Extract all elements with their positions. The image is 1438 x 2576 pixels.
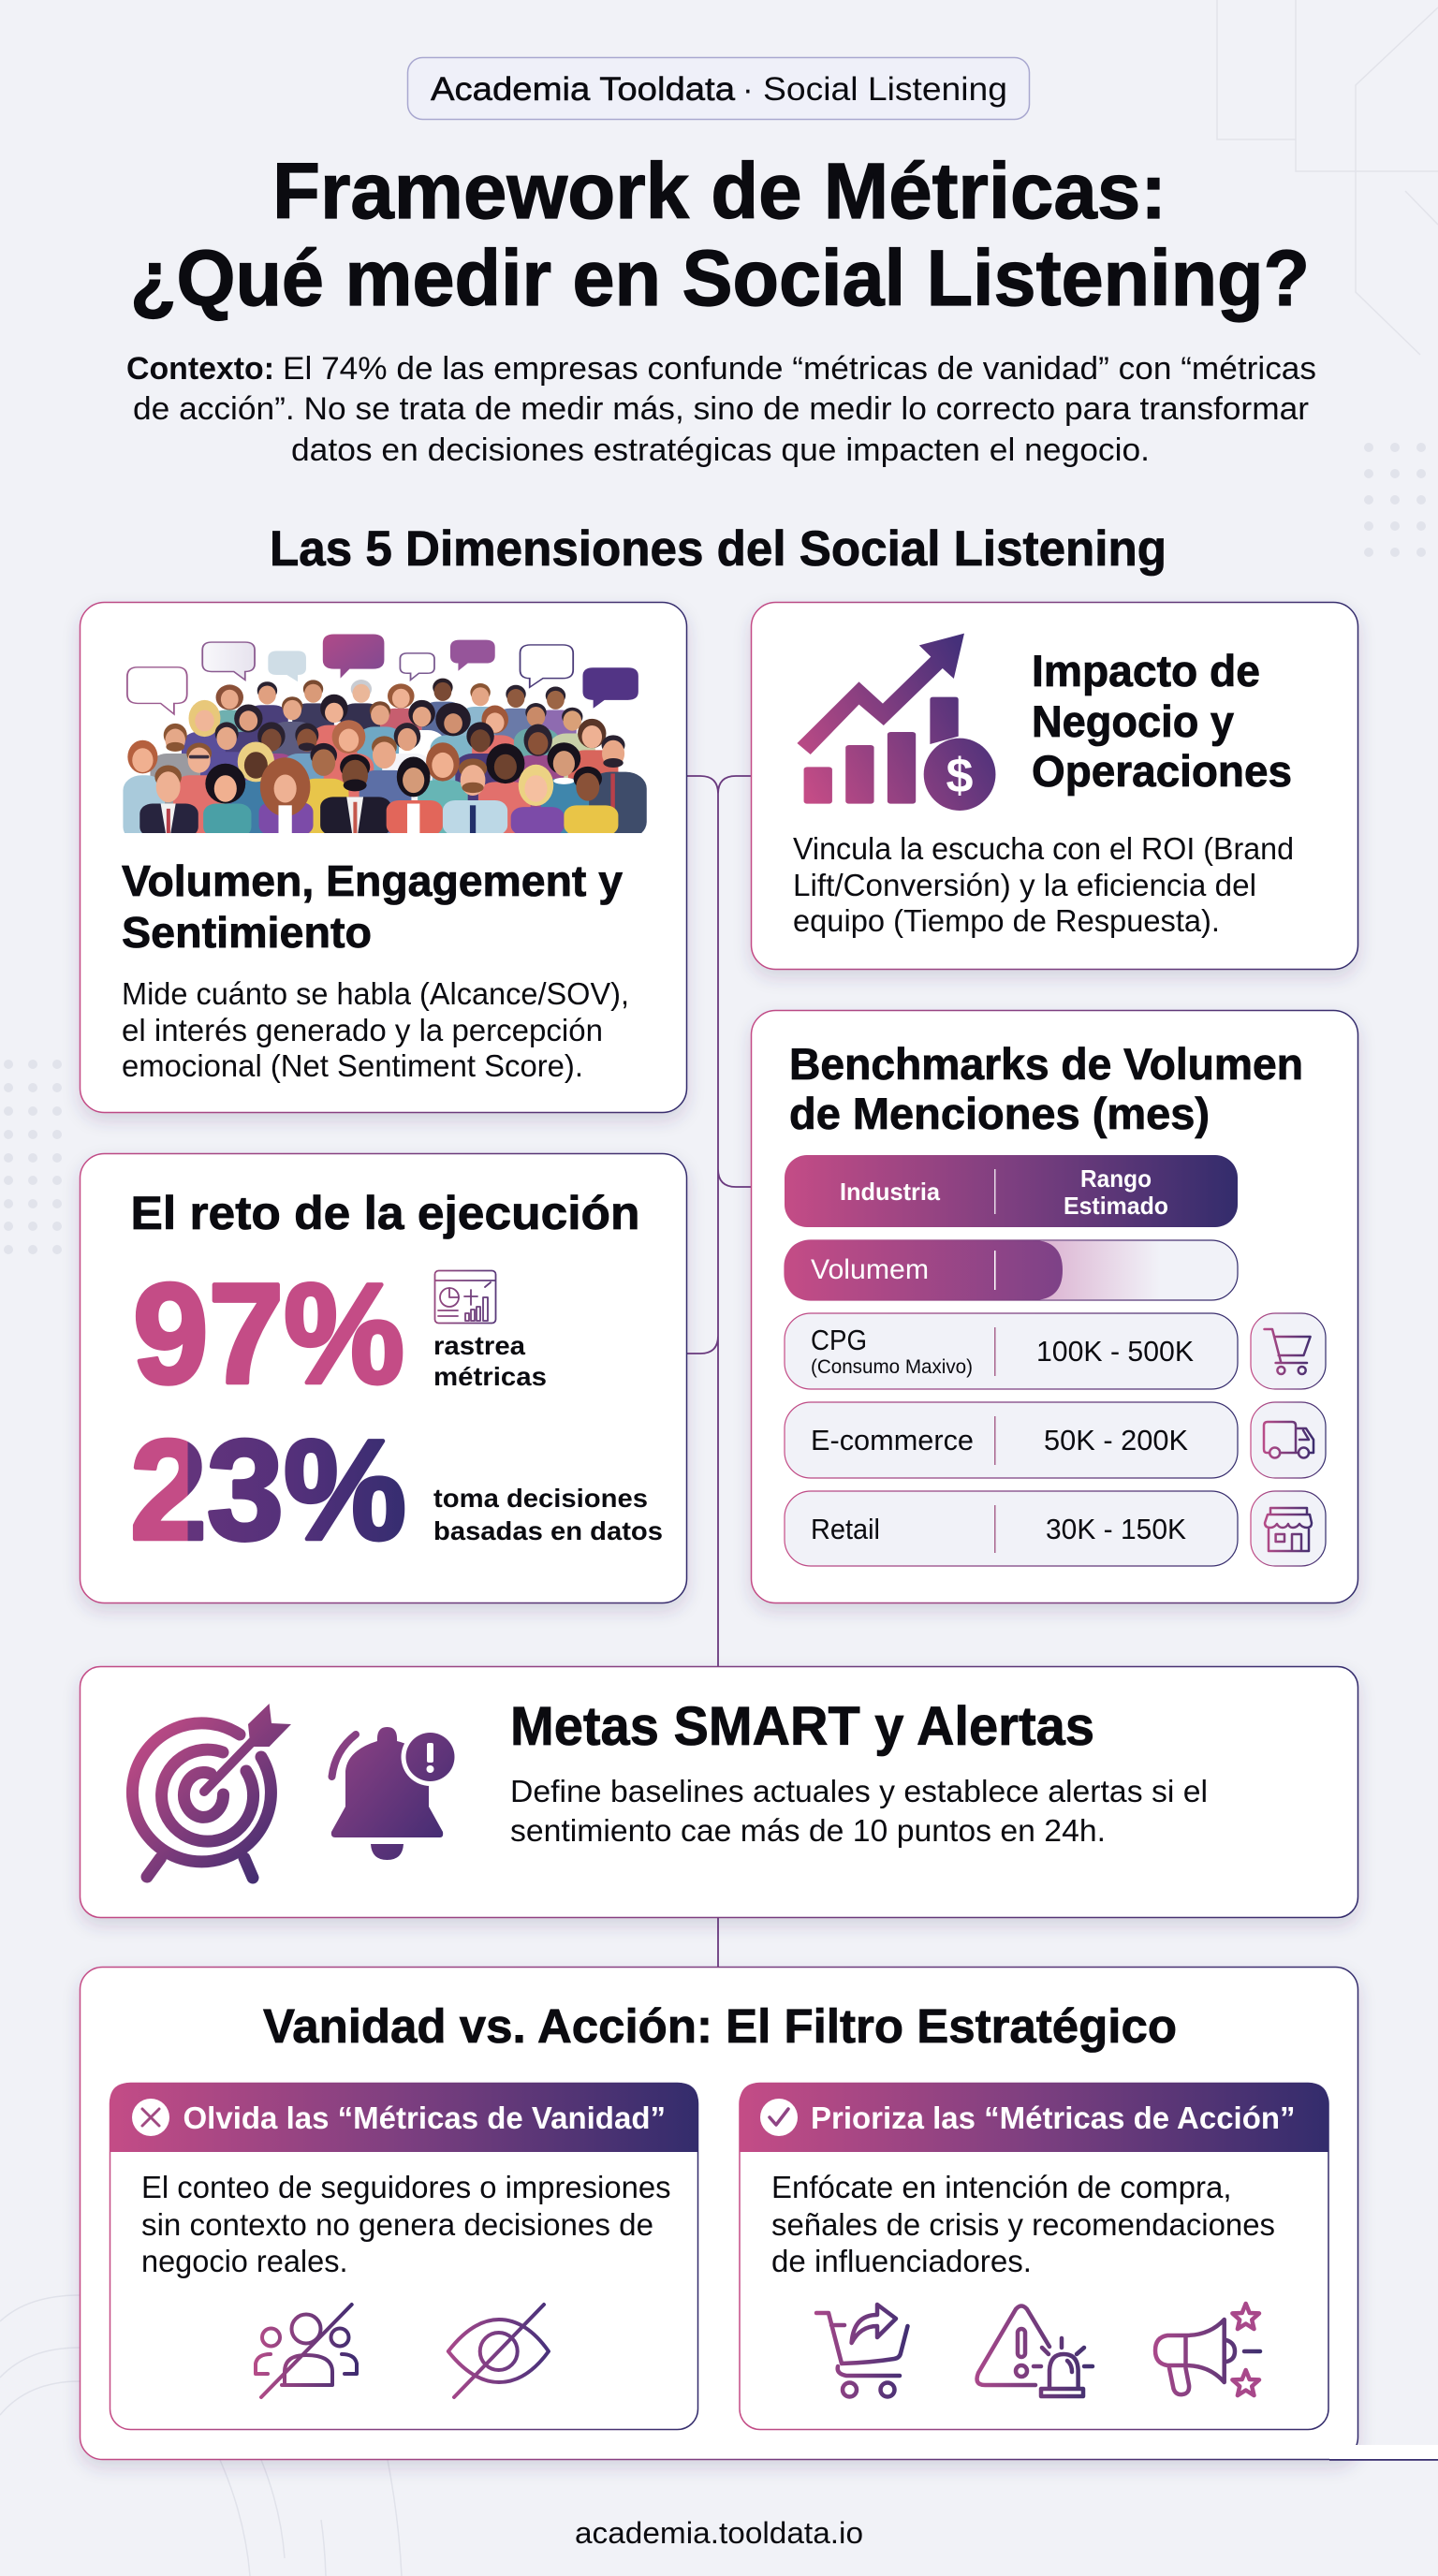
title: ¿Qué medir en Social Listening? (130, 234, 1310, 322)
row: CPG: 100K - 500K (1036, 1335, 1194, 1368)
second row (182, 732, 226, 775)
body text: negocio reales. (141, 2244, 348, 2278)
decorative lines top right (1217, 0, 1438, 355)
icon: shopping cart (1251, 1313, 1326, 1389)
description: Lift/Conversión) y la eficiencia del (793, 868, 1256, 902)
context paragraph: El 74% de las empresas confunde “métricas de vanidad” con “métricas (283, 351, 1316, 387)
icon: warning with siren (977, 2306, 1093, 2396)
statistic: 23%: 23% (130, 1411, 406, 1570)
connector lines (686, 776, 751, 1967)
decorative arcs bottom left (0, 2295, 402, 2576)
description: equipo (Tiempo de Respuesta). (793, 903, 1220, 938)
context paragraph: datos en decisiones estratégicas que impacten el negocio. (291, 432, 1150, 468)
header pill: · (742, 71, 754, 108)
heading: El reto de la ejecución (131, 1187, 640, 1239)
panel: volumen engagement y sentimiento (81, 603, 687, 1112)
header pill (408, 58, 1030, 120)
body text (771, 2170, 1275, 2278)
table header: Industria (840, 1178, 941, 1206)
heading: Benchmarks de Volumen (789, 1039, 1303, 1089)
icon: cart with arrow (816, 2305, 908, 2396)
context paragraph: de acción”. No se trata de medir más, sino de medir lo correcto para transformar (133, 391, 1309, 427)
body text: El conteo de seguidores o impresiones (141, 2170, 670, 2204)
panel: metas smart y alertas (81, 1666, 1357, 1917)
middle row (150, 754, 200, 803)
heading: de Menciones (mes) (789, 1089, 1210, 1138)
icon: growth chart with coin (797, 634, 995, 811)
label: rastrea metricas: métricas (433, 1362, 547, 1391)
decorative dots right (1364, 443, 1426, 557)
description: el interés generado y la percepción (122, 1013, 603, 1047)
context paragraph (126, 351, 1316, 468)
heading: Negocio y (1032, 696, 1234, 746)
label: toma decisiones (433, 1484, 663, 1545)
back row (215, 710, 245, 732)
description (122, 976, 629, 1083)
table header: Rango (1080, 1164, 1152, 1193)
panel: el reto de la ejecucion (81, 1153, 687, 1603)
heading: Metas SMART y Alertas (510, 1696, 1094, 1757)
icon: x circle (132, 2099, 169, 2136)
icon: target with arrow (132, 1704, 291, 1878)
label: toma decisiones: toma decisiones (433, 1484, 648, 1513)
panel: benchmarks (751, 1011, 1357, 1603)
description: Define baselines actuales y establece alertas si el (510, 1774, 1208, 1808)
row: e-commerce: E-commerce (811, 1424, 974, 1456)
row: retail (785, 1491, 1238, 1566)
row: e-commerce (785, 1402, 1238, 1478)
panel: impacto de negocio y operaciones (751, 603, 1357, 970)
row: CPG (785, 1313, 1238, 1389)
icon: people crossed out (256, 2305, 357, 2397)
body text (141, 2170, 670, 2278)
row: CPG: (Consumo Maxivo) (811, 1356, 973, 1378)
label: rastrea metricas (433, 1331, 547, 1391)
description: emocional (Net Sentiment Score). (122, 1048, 583, 1083)
icon: growth chart with coin: $ (946, 749, 974, 803)
heading: Volumen, Engagement y (122, 856, 623, 905)
table header: Estimado (1064, 1192, 1168, 1220)
icon: bell with alert (331, 1727, 459, 1860)
illustration: crowd with speech bubbles (123, 634, 647, 849)
table header (785, 1155, 1238, 1227)
section heading: Las 5 Dimensiones del Social Listening (270, 521, 1167, 577)
description: sentimiento cae más de 10 puntos en 24h. (510, 1813, 1106, 1848)
front-middle row (123, 775, 165, 833)
description (510, 1774, 1208, 1848)
row: e-commerce: 50K - 200K (1044, 1424, 1188, 1456)
body text: sin contexto no genera decisiones de (141, 2207, 653, 2242)
heading (122, 856, 623, 957)
heading: Operaciones (1032, 746, 1292, 796)
description: Vincula la escucha con el ROI (Brand (793, 831, 1294, 866)
icon: megaphone with stars (1155, 2304, 1260, 2395)
heading: Sentimiento (122, 908, 372, 957)
sub-panel: vanity metrics: Olvida las “Métricas de Vanidad” (183, 2100, 666, 2135)
heading: Impacto de (1032, 646, 1260, 695)
description: Mide cuánto se habla (Alcance/SOV), (122, 976, 629, 1011)
row: CPG: CPG (811, 1324, 867, 1356)
front row (139, 803, 198, 833)
context paragraph: Contexto: (126, 351, 274, 387)
icon: eye crossed out (448, 2305, 549, 2397)
icon: delivery truck (1251, 1402, 1326, 1478)
heading (1032, 646, 1292, 796)
icon: check circle (760, 2099, 798, 2136)
sub-panel: action metrics: Prioriza las “Métricas de Acción” (811, 2100, 1296, 2135)
sub-panel: vanity metrics (110, 2083, 698, 2430)
row: retail: 30K - 150K (1046, 1513, 1186, 1545)
volume row (785, 1240, 1238, 1300)
body text: Enfócate en intención de compra, (771, 2170, 1232, 2204)
heading (789, 1039, 1303, 1138)
footer url: academia.tooldata.io (575, 2516, 863, 2550)
label: toma decisiones: basadas en datos (433, 1516, 663, 1545)
statistic: 97%: 97% (133, 1254, 404, 1413)
icon: dashboard (434, 1271, 496, 1324)
row: retail: Retail (811, 1513, 880, 1545)
sub-panel: action metrics (740, 2083, 1328, 2430)
body text: de influenciadores. (771, 2244, 1032, 2278)
icon: store (1251, 1491, 1326, 1566)
decorative dots left (4, 1060, 62, 1254)
body text: señales de crisis y recomendaciones (771, 2207, 1275, 2242)
volume row: Volumem (811, 1254, 929, 1285)
header pill: Academia Tooldata (431, 71, 736, 108)
heading: Vanidad vs. Acción: El Filtro Estratégico (263, 1999, 1177, 2053)
description (793, 831, 1294, 938)
title (130, 147, 1310, 322)
header pill: Social Listening (763, 71, 1007, 108)
panel: vanidad vs accion (81, 1968, 1438, 2461)
white band at bottom right (1329, 2445, 1438, 2459)
title: Framework de Métricas: (272, 147, 1167, 235)
label: rastrea metricas: rastrea (433, 1331, 525, 1360)
